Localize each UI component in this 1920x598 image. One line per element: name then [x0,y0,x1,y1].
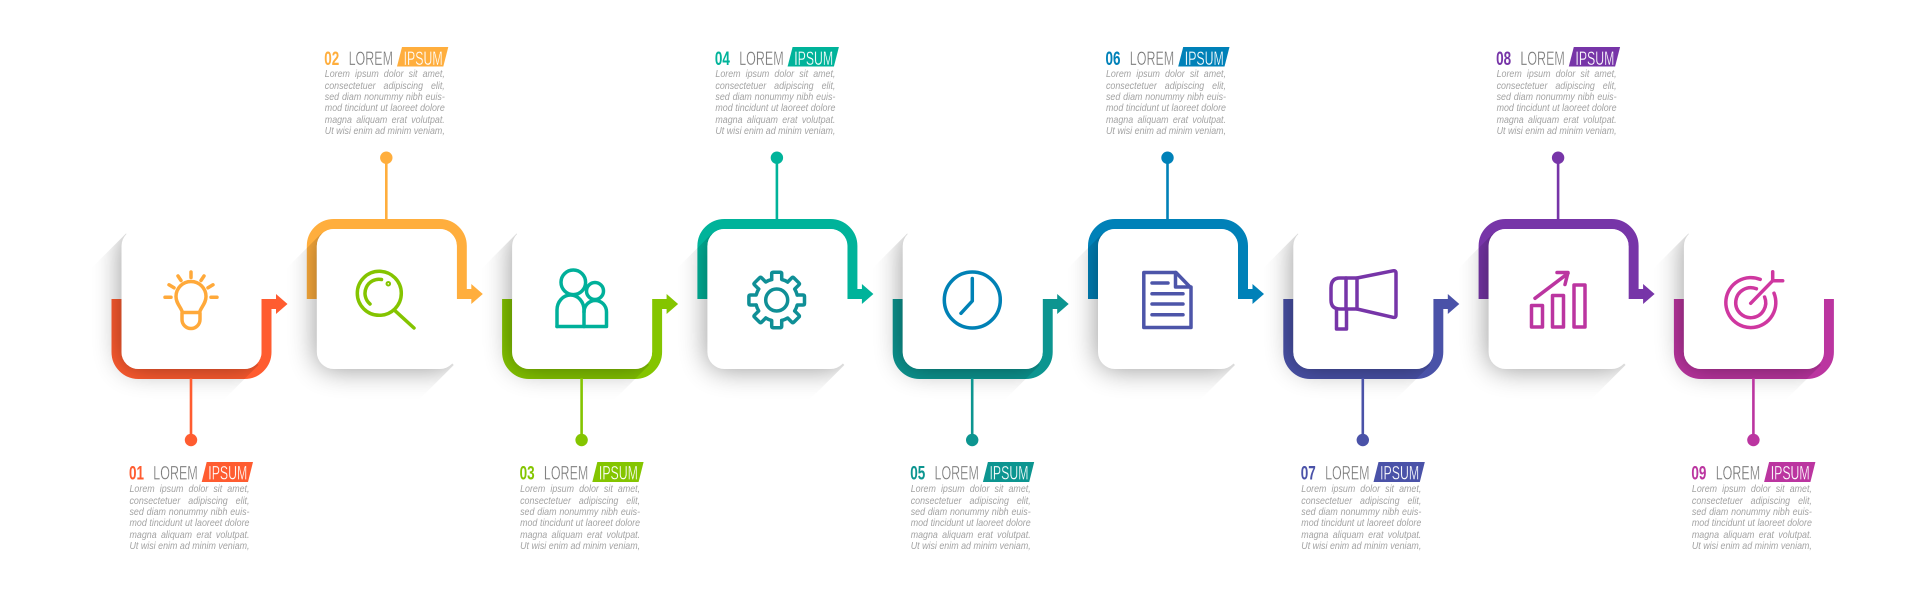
text block 6: Ut wisi enim ad minim veniam, [1106,126,1225,137]
text block 8 [1496,69,1617,139]
heading 2: IPSUM [404,48,443,70]
connector 5 [966,378,978,446]
text block 8: Lorem ipsum dolor sit amet, [1496,69,1616,80]
text block 6: magna aliquam erat volutpat. [1106,115,1225,126]
card shadow [317,229,457,369]
text block 2 [324,69,445,139]
band 1 with arrow [116,294,288,374]
text block 2: Lorem ipsum dolor sit amet, [324,69,444,80]
band 7 with arrow [1288,294,1459,374]
text block 8: Ut wisi enim ad minim veniam, [1496,126,1616,137]
heading 9: 09 [1691,462,1706,484]
heading 2: 02 [324,48,339,70]
heading 2 [324,47,448,70]
card shadow [1293,229,1433,369]
heading 5 [910,462,1034,484]
step 6 [1093,47,1264,369]
text block 7: magna aliquam erat volutpat. [1301,530,1421,541]
icon: light bulb [165,272,217,328]
text block 5: sed diam nonummy nibh euis- [910,507,1030,518]
connector 2 [380,152,392,220]
card shadow [122,229,262,369]
text block 5 [910,484,1031,554]
text block 7: mod tincidunt ut laoreet dolore [1301,518,1421,529]
text block 7: Lorem ipsum dolor sit amet, [1301,484,1421,495]
heading 3: IPSUM [599,462,638,484]
heading 5: LOREM [935,462,979,484]
text block 1: sed diam nonummy nibh euis- [129,507,249,518]
text block 5: magna aliquam erat volutpat. [910,530,1030,541]
heading 8: LOREM [1520,48,1565,70]
text block 6: sed diam nonummy nibh euis- [1106,92,1225,103]
card 4 [707,229,847,369]
connector 1 [185,378,197,446]
card 8 [1489,229,1629,369]
icon: gear [749,272,804,328]
band 2 with arrow [312,224,483,304]
text block 4 [715,69,836,139]
connector 7 [1357,378,1369,446]
card 1 [122,229,262,369]
text block 3: Lorem ipsum dolor sit amet, [520,484,640,495]
icon: clock [944,272,1000,328]
heading 4: IPSUM [794,48,833,70]
band 6 with arrow [1093,224,1264,304]
band 9 [1679,299,1829,374]
text block 7 [1301,484,1422,554]
text block 2: Ut wisi enim ad minim veniam, [324,126,444,137]
icon: megaphone [1331,271,1396,329]
icon: people [557,270,606,326]
text block 1: mod tincidunt ut laoreet dolore [129,518,249,529]
text block 3: consectetuer adipiscing elit, [520,496,640,507]
text block 3: Ut wisi enim ad minim veniam, [520,541,640,552]
heading 1: IPSUM [208,462,247,484]
icon: target [1726,272,1783,328]
band 5 with arrow [898,294,1069,374]
heading 6: LOREM [1130,48,1174,70]
text block 1 [129,484,250,554]
text block 9: mod tincidunt ut laoreet dolore [1691,518,1811,529]
heading 9 [1691,462,1815,484]
step 1 [116,229,288,554]
heading 6: 06 [1106,48,1121,70]
card shadow [1098,229,1238,369]
band 3 with arrow [507,294,678,374]
heading 1: LOREM [153,462,198,484]
heading 8: 08 [1496,48,1511,70]
text block 2: sed diam nonummy nibh euis- [324,92,444,103]
connector 3 [575,378,588,446]
heading 3: 03 [520,462,535,484]
text block 1: consectetuer adipiscing elit, [129,496,249,507]
text block 8: sed diam nonummy nibh euis- [1496,92,1616,103]
step 8 [1484,47,1655,369]
heading 5: 05 [910,462,925,484]
text block 2: magna aliquam erat volutpat. [324,115,444,126]
connector 6 [1161,152,1174,220]
card 9 [1684,229,1824,369]
card 5 [903,229,1043,369]
card shadow [512,229,652,369]
card 6 [1098,229,1238,369]
text block 9: magna aliquam erat volutpat. [1691,530,1811,541]
step 9 [1679,229,1829,554]
text block 2: consectetuer adipiscing elit, [324,81,444,92]
card 3 [512,229,652,369]
connector 4 [771,152,783,220]
text block 4: mod tincidunt ut laoreet dolore [715,103,835,114]
heading 7: 07 [1301,462,1316,484]
heading 8 [1496,47,1620,70]
heading 7: IPSUM [1380,462,1419,484]
card 2 [317,229,457,369]
text block 9: Ut wisi enim ad minim veniam, [1691,541,1811,552]
heading 4: 04 [715,48,730,70]
text block 8: consectetuer adipiscing elit, [1496,81,1616,92]
text block 9 [1691,484,1812,554]
text block 7: consectetuer adipiscing elit, [1301,496,1421,507]
heading 3 [520,462,644,484]
text block 1: Lorem ipsum dolor sit amet, [129,484,249,495]
text block 7: Ut wisi enim ad minim veniam, [1301,541,1421,552]
text block 5: Lorem ipsum dolor sit amet, [910,484,1030,495]
text block 4: Lorem ipsum dolor sit amet, [715,69,835,80]
heading 4: LOREM [739,48,784,70]
text block 5: Ut wisi enim ad minim veniam, [910,541,1030,552]
text block 5: mod tincidunt ut laoreet dolore [910,518,1030,529]
band 8 with arrow [1484,224,1655,304]
text block 4: sed diam nonummy nibh euis- [715,92,835,103]
card shadow [1684,229,1824,369]
card 7 [1293,229,1433,369]
heading 6 [1106,47,1230,70]
heading 8: IPSUM [1575,48,1614,70]
text block 3 [520,484,641,554]
text block 6 [1106,69,1226,139]
heading 5: IPSUM [990,462,1029,484]
heading 6: IPSUM [1185,48,1224,70]
card shadow [707,229,847,369]
text block 4: consectetuer adipiscing elit, [715,81,835,92]
text block 4: magna aliquam erat volutpat. [715,115,835,126]
heading 3: LOREM [544,462,588,484]
connector 9 [1747,378,1760,446]
text block 6: consectetuer adipiscing elit, [1106,81,1225,92]
heading 1: 01 [129,462,144,484]
text block 7: sed diam nonummy nibh euis- [1301,507,1421,518]
icon: magnifier [357,271,414,328]
card shadow [1489,229,1629,369]
step 3 [507,229,678,554]
text block 8: mod tincidunt ut laoreet dolore [1496,103,1616,114]
text block 2: mod tincidunt ut laoreet dolore [324,103,444,114]
step 7 [1288,229,1459,554]
step 5 [898,229,1069,554]
text block 9: sed diam nonummy nibh euis- [1691,507,1811,518]
text block 8: magna aliquam erat volutpat. [1496,115,1616,126]
heading 9: LOREM [1716,462,1760,484]
heading 7 [1301,462,1425,484]
text block 9: consectetuer adipiscing elit, [1691,496,1811,507]
text block 1: magna aliquam erat volutpat. [129,530,249,541]
band 4 with arrow [702,224,873,304]
text block 4: Ut wisi enim ad minim veniam, [715,126,835,137]
text block 5: consectetuer adipiscing elit, [910,496,1030,507]
step 2 [312,47,483,369]
text block 6: mod tincidunt ut laoreet dolore [1106,103,1225,114]
text block 6: Lorem ipsum dolor sit amet, [1106,69,1225,80]
heading 4 [715,47,839,70]
connector 8 [1552,152,1564,220]
heading 1 [129,462,253,484]
text block 1: Ut wisi enim ad minim veniam, [129,541,249,552]
text block 9: Lorem ipsum dolor sit amet, [1691,484,1811,495]
text block 3: mod tincidunt ut laoreet dolore [520,518,640,529]
heading 7: LOREM [1325,462,1370,484]
heading 2: LOREM [349,48,393,70]
heading 9: IPSUM [1771,462,1810,484]
text block 3: sed diam nonummy nibh euis- [520,507,640,518]
step 4 [702,47,873,369]
text block 3: magna aliquam erat volutpat. [520,530,640,541]
card shadow [903,229,1043,369]
icon: document [1144,272,1191,328]
icon: bar chart with arrow [1532,272,1585,327]
